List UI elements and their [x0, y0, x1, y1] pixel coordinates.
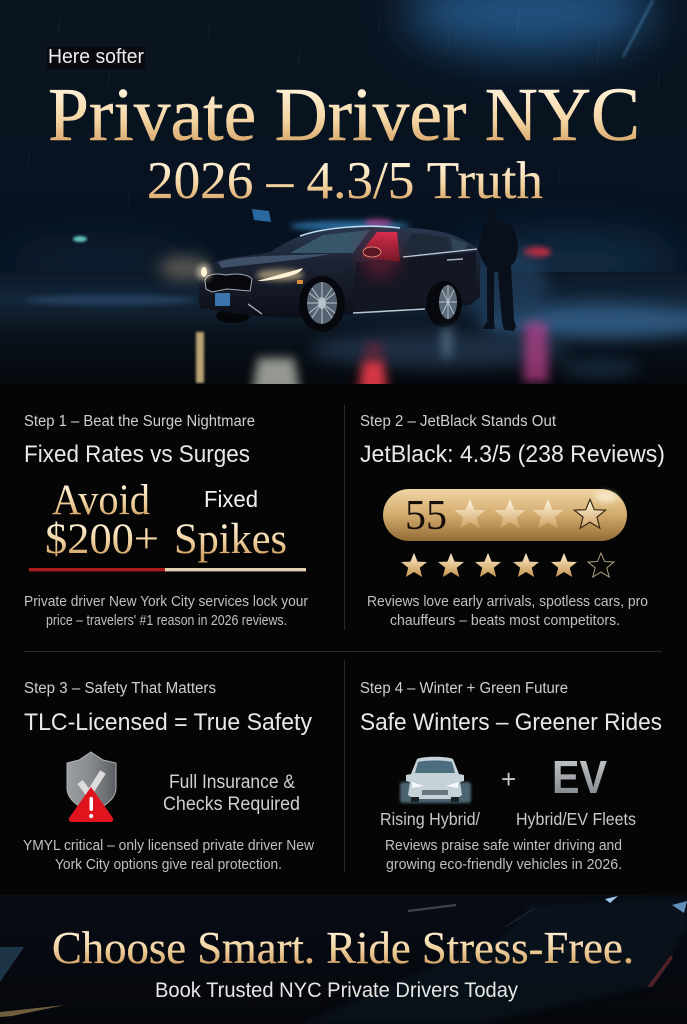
avoid text: Avoid	[52, 477, 150, 524]
step 2 description: chauffeurs – beats most competitors.	[390, 612, 620, 629]
step 3 description: YMYL critical – only licensed private driver New	[23, 837, 314, 854]
car	[197, 226, 480, 332]
left road sheen	[25, 295, 195, 305]
blue glow upper right	[405, 0, 655, 54]
price text: $200+	[45, 516, 159, 563]
step 4 description: growing eco-friendly vehicles in 2026.	[386, 856, 622, 873]
door handle hint	[408, 905, 456, 911]
hybrid fleets caption: Hybrid/EV Fleets	[516, 809, 636, 829]
front bumper trim	[248, 304, 262, 314]
night sky	[0, 0, 687, 272]
teal street light	[73, 236, 87, 242]
panel: step 2	[360, 413, 665, 629]
rear wheel	[426, 281, 462, 327]
step 4 description: Reviews praise safe winter driving and	[385, 837, 622, 854]
step 2 description: Reviews love early arrivals, spotless cars, pro	[367, 593, 648, 610]
rising hybrid caption: Rising Hybrid/	[380, 809, 480, 829]
spikes text: Spikes	[174, 516, 287, 563]
wet road	[0, 272, 687, 384]
panel: step 4	[360, 680, 662, 873]
rear window	[406, 233, 448, 246]
step 1 description	[24, 593, 308, 629]
headlight beam glow	[159, 257, 211, 279]
panel dividers	[24, 405, 662, 872]
pink reflection	[523, 322, 549, 382]
EV mark: EV	[552, 751, 607, 803]
background red lights	[523, 247, 551, 257]
left headlight hint	[0, 947, 24, 982]
insurance note	[163, 772, 300, 815]
upper red reflection	[364, 342, 384, 358]
roof highlight	[605, 896, 618, 903]
headlight left	[201, 267, 207, 277]
right blue highlight	[672, 901, 687, 913]
chauffeur figure	[478, 204, 518, 331]
light streak	[623, 0, 653, 57]
car body hint	[300, 900, 687, 1024]
road reflections	[196, 322, 640, 392]
headlight right	[257, 268, 303, 281]
windshield	[290, 230, 370, 253]
step 3 description	[23, 837, 314, 873]
centre road sheen	[310, 332, 570, 368]
front left tyre	[216, 311, 250, 323]
gold reflection	[196, 332, 204, 383]
icon: shield with warning	[67, 752, 116, 822]
roof light	[300, 226, 400, 236]
step 3 description: York City options give real protection.	[55, 856, 282, 873]
step 1 description: price – travelers' #1 reason in 2026 reviews.	[46, 612, 287, 629]
mirror	[363, 247, 381, 257]
left mist	[50, 249, 150, 272]
subtitle: 2026 – 4.3/5 Truth	[147, 152, 543, 210]
roof blue glow	[290, 221, 410, 231]
call to action heading: Choose Smart. Ride Stress-Free.	[52, 922, 634, 973]
star rating row	[401, 553, 614, 577]
gold rating pill: 55	[405, 493, 447, 539]
gold glint	[0, 1005, 65, 1017]
front wheel	[299, 276, 345, 332]
red rear glint	[647, 955, 673, 987]
red door window	[363, 232, 400, 262]
blue road sheen	[480, 305, 687, 339]
red door glow	[360, 232, 400, 280]
hero photo: car in the rain	[0, 0, 687, 392]
gold rating pill	[383, 489, 627, 541]
license plate	[215, 293, 230, 306]
right water sheen	[560, 359, 640, 377]
sill light	[353, 309, 425, 313]
rear quarter window	[451, 238, 468, 250]
step 1 heading: Fixed Rates vs Surges	[24, 441, 250, 468]
step 4 label: Step 4 – Winter + Green Future	[360, 680, 568, 697]
mist behind chauffeur	[463, 247, 547, 323]
character line	[403, 249, 477, 257]
headlight glow	[256, 269, 304, 281]
step 2 heading: JetBlack: 4.3/5 (238 Reviews)	[360, 441, 665, 468]
insurance note: Full Insurance &	[169, 772, 295, 793]
hood highlight	[218, 254, 330, 268]
body crease	[505, 908, 535, 927]
step 4 description	[385, 837, 622, 873]
step 3 label: Step 3 – Safety That Matters	[24, 680, 216, 697]
plus sign: +	[501, 764, 516, 794]
fixed text: Fixed	[204, 486, 258, 512]
roof pink glow	[364, 219, 392, 227]
footer base	[0, 895, 687, 1024]
step 4 heading: Safe Winters – Greener Rides	[360, 709, 662, 736]
main title: Private Driver NYC	[48, 73, 640, 157]
call to action subtext: Book Trusted NYC Private Drivers Today	[155, 978, 518, 1002]
blue reflection	[441, 328, 453, 358]
panel: step 1	[24, 413, 308, 629]
insurance note: Checks Required	[163, 794, 300, 815]
white reflection	[252, 358, 300, 392]
door handle	[447, 259, 463, 260]
icon: car front	[400, 757, 471, 803]
step 3 heading: TLC-Licensed = True Safety	[24, 709, 312, 736]
panel: step 3	[23, 680, 314, 873]
step 2 label: Step 2 – JetBlack Stands Out	[360, 413, 557, 430]
step 2 description	[367, 593, 648, 629]
comparison bar	[29, 568, 306, 571]
background mist	[460, 234, 680, 290]
amber marker	[297, 280, 303, 284]
kicker text: Here softer	[48, 46, 144, 68]
car body	[199, 226, 480, 318]
door shading	[353, 252, 476, 312]
grille	[205, 274, 252, 292]
rain streaks	[28, 10, 660, 204]
red reflection	[358, 360, 388, 392]
blue sign	[252, 209, 271, 222]
step 1 label: Step 1 – Beat the Surge Nightmare	[24, 413, 255, 430]
footer banner background	[0, 895, 687, 1024]
step 1 description: Private driver New York City services lock your	[24, 593, 308, 610]
